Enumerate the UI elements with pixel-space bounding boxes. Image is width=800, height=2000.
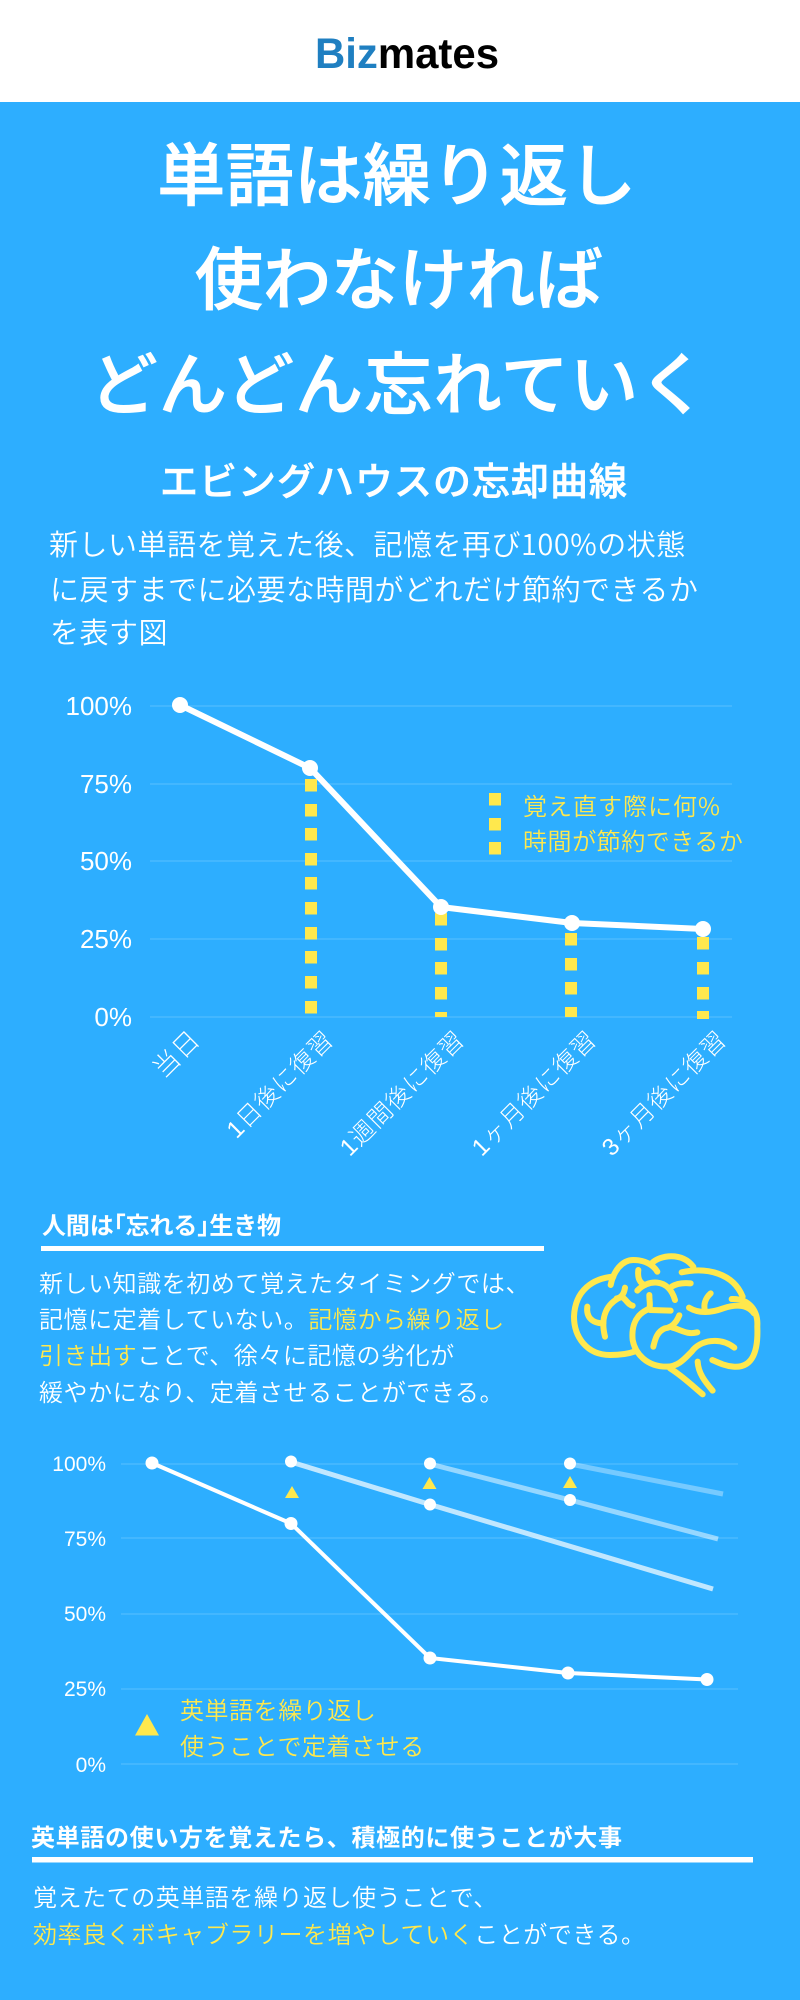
subtitle: エビングハウスの忘却曲線 (160, 462, 628, 504)
y axis labels (66, 691, 132, 1032)
x axis labels (147, 1024, 732, 1161)
title (90, 139, 708, 424)
gridlines (121, 1464, 738, 1764)
header bar (0, 0, 800, 102)
curve line (180, 705, 703, 929)
closing text (33, 1878, 646, 1950)
x axis labels: 3ヶ月後に復習 (597, 1026, 732, 1161)
intro text: に戻すまでに必要な時間がどれだけ節約できるか (50, 567, 698, 609)
y axis labels: 0% (76, 1754, 106, 1777)
data points (146, 1456, 714, 1686)
y axis labels: 100% (52, 1453, 106, 1476)
legend: dashed (489, 787, 743, 857)
y axis labels: 25% (64, 1678, 106, 1701)
line chart: forgetting curve (66, 691, 743, 1161)
line chart: repeated review (52, 1453, 738, 1777)
legend: dashed: 覚え直す際に何% (523, 787, 721, 822)
title: 使わなければ (195, 243, 603, 319)
section heading: use actively: 英単語の使い方を覚えたら、積極的に使うことが大事 (31, 1824, 623, 1852)
gridlines (150, 706, 732, 1017)
legend: triangle: 使うことで定着させる (180, 1727, 425, 1762)
legend: triangle: 英単語を繰り返し (180, 1691, 376, 1726)
x axis labels: 1週間後に復習 (335, 1026, 470, 1161)
review line 3 (430, 1464, 718, 1539)
y axis labels: 0% (94, 1002, 132, 1032)
intro text: 新しい単語を覚えた後、記憶を再び100%の状態 (49, 522, 686, 564)
x axis labels: 1日後に復習 (222, 1026, 339, 1144)
closing text: 覚えたての英単語を繰り返し使うことで、 (33, 1878, 498, 1913)
review markers (285, 1476, 577, 1498)
heading rule (32, 1857, 753, 1862)
section text: 緩やかになり、定着させることができる。 (39, 1373, 504, 1408)
y axis labels: 100% (66, 691, 132, 721)
y axis labels: 75% (64, 1528, 106, 1551)
y axis labels (52, 1453, 106, 1777)
section text: 新しい知識を初めて覚えたタイミングでは、 (39, 1264, 530, 1299)
icon: brain (574, 1256, 757, 1394)
y axis labels: 50% (64, 1603, 106, 1626)
y axis labels: 75% (80, 769, 132, 799)
x axis labels: 1ヶ月後に復習 (467, 1026, 602, 1161)
curve points (172, 697, 711, 937)
review line 2 (291, 1462, 713, 1589)
heading rule (41, 1246, 544, 1251)
legend: dashed: 時間が節約できるか (523, 822, 743, 857)
title: どんどん忘れていく (90, 348, 708, 424)
section text (39, 1264, 530, 1408)
logo: Bizmates: Bizmates (315, 30, 499, 78)
section text: 引き出すことで、徐々に記憶の劣化が (39, 1336, 455, 1371)
review line 4 (570, 1464, 723, 1494)
intro text: を表す図 (50, 610, 168, 652)
forgetting line (152, 1463, 707, 1680)
x axis labels: 当日 (147, 1024, 206, 1083)
y axis labels: 25% (80, 924, 132, 954)
intro text (49, 522, 698, 652)
title: 単語は繰り返し (157, 139, 637, 215)
y axis labels: 50% (80, 846, 132, 876)
dashed yellow savings bars (305, 779, 709, 1019)
section text: 記憶に定着していない。記憶から繰り返し (39, 1300, 505, 1335)
section heading: humans forget: 人間は｢忘れる｣生き物 (42, 1213, 281, 1240)
legend: triangle (135, 1691, 425, 1762)
closing text: 効率良くボキャブラリーを増やしていくことができる。 (33, 1915, 646, 1950)
